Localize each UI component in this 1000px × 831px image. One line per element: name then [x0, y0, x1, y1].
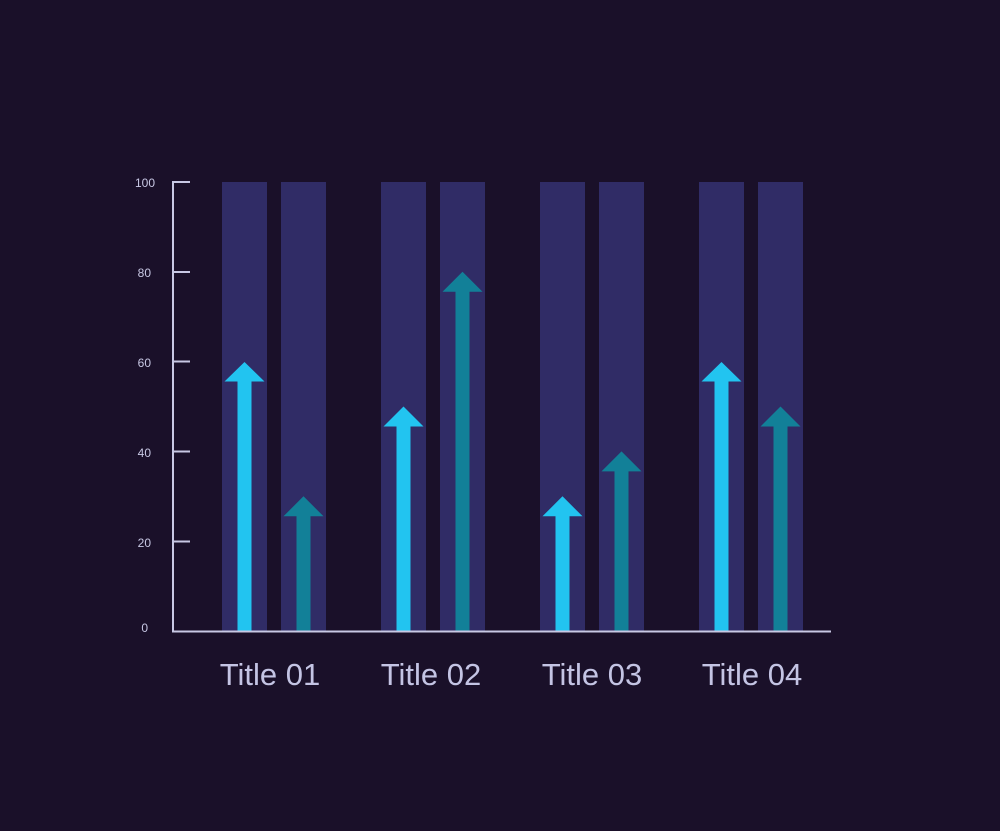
arrow: Title 01 b (30): [284, 496, 324, 631]
x axis labels: Title 04: [702, 657, 802, 692]
x axis labels: Title 03: [542, 657, 642, 692]
arrow: Title 03 b (40): [602, 451, 642, 631]
x axis labels: Title 01: [220, 657, 320, 692]
arrow: Title 01 a (60): [224, 362, 264, 631]
arrow: Title 03 a (30): [542, 496, 582, 631]
y axis labels: 100: [135, 176, 155, 190]
arrows: [224, 272, 800, 631]
x axis labels: [220, 657, 802, 692]
y axis labels: 20: [138, 536, 151, 550]
axes: [172, 181, 831, 632]
arrow: Title 04 a (60): [702, 362, 742, 631]
background columns: [222, 182, 803, 631]
y axis labels: [135, 176, 155, 635]
y axis labels: 80: [138, 266, 151, 280]
y axis labels: 40: [138, 446, 151, 460]
arrow: Title 02 a (50): [384, 406, 424, 631]
x axis labels: Title 02: [381, 657, 481, 692]
y axis labels: 0: [141, 621, 148, 635]
arrow: Title 04 b (50): [760, 406, 800, 631]
arrow: Title 02 b (80): [442, 272, 482, 631]
y axis labels: 60: [138, 356, 151, 370]
